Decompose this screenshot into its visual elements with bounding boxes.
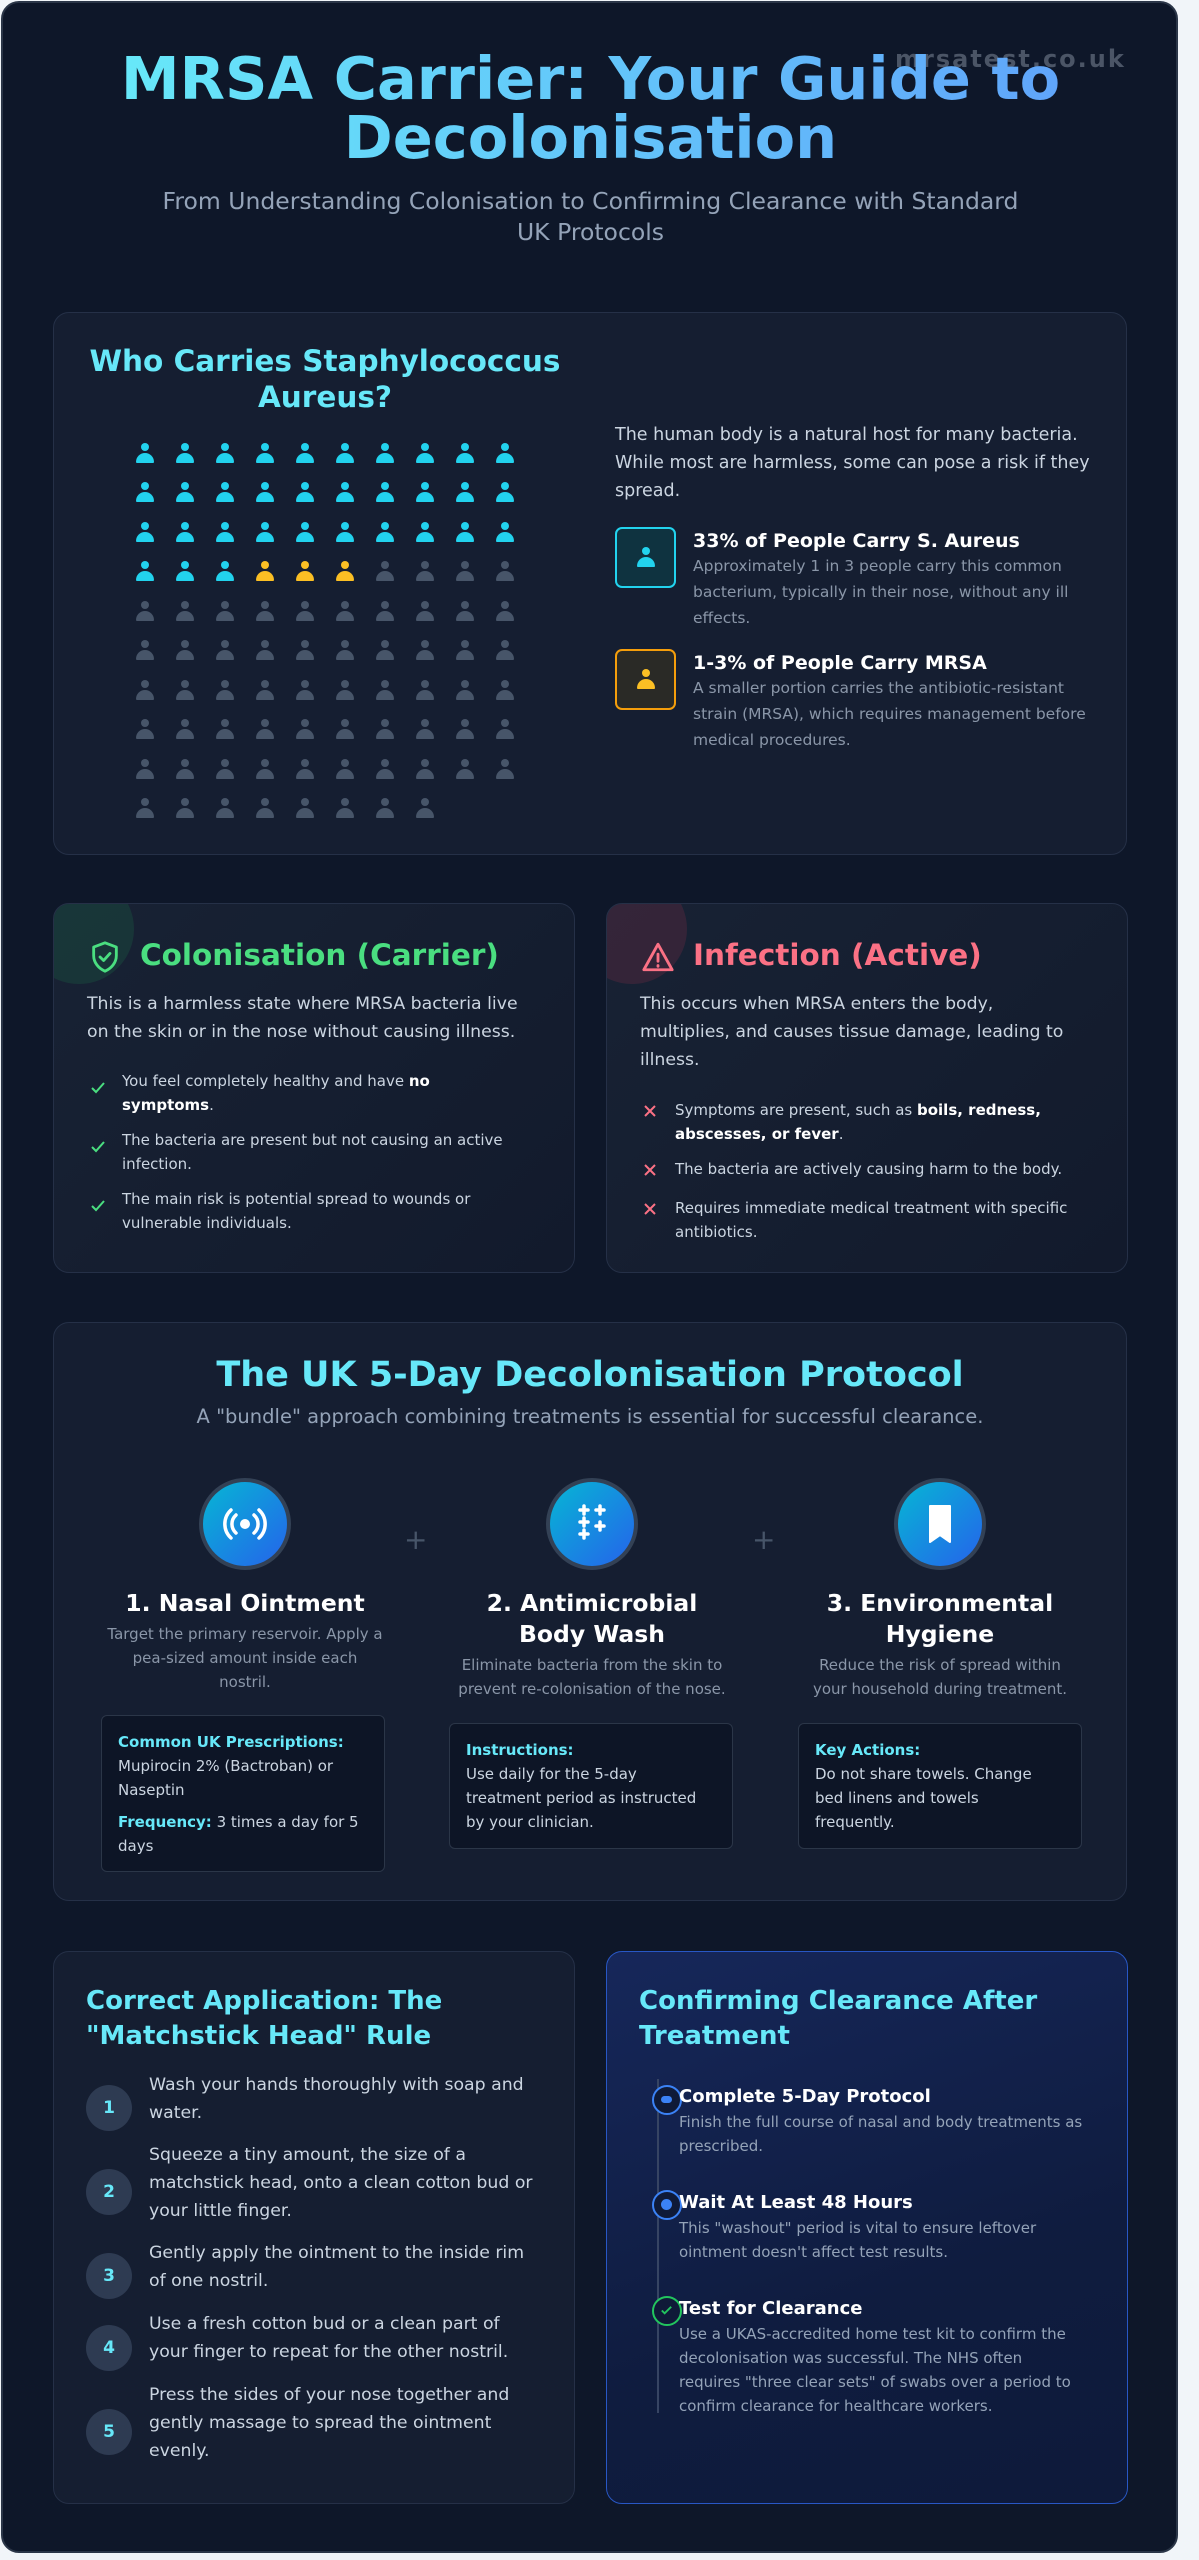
step: hygiene: Hygiene: [886, 1620, 994, 1648]
title: Decolonisation: [344, 103, 837, 172]
list: colonisation points: You feel completely healthy and have no symptoms.: [122, 1072, 430, 1114]
timeline: Test for Clearance: [679, 2298, 862, 2319]
box: prescriptions: Frequency: 3 times a day for 5 days: [118, 1813, 359, 1855]
heading: colonisation: Colonisation (Carrier): [140, 938, 499, 972]
box: instructions: Use daily for the 5-day treatment period as instructed by your clinician.: [466, 1765, 696, 1831]
icon: warning: [642, 942, 674, 972]
timeline: This "washout" period is vital to ensure leftover ointment doesn't affect test results.: [679, 2219, 1036, 2261]
steps list: [86, 2075, 532, 2461]
heading: clearance: Confirming Clearance After Treatment: [639, 1986, 1037, 2051]
panel: infection: [606, 903, 1128, 1273]
list: colonisation points: The bacteria are present but not causing an active infection.: [122, 1131, 503, 1173]
steps list: 5: [103, 2422, 115, 2442]
steps list: Use a fresh cotton bud or a clean part of your finger to repeat for the other nostril.: [149, 2314, 508, 2362]
box: key actions: Key Actions:: [815, 1741, 920, 1759]
subtitle: protocol: A "bundle" approach combining treatments is essential for successful clearance.: [197, 1405, 983, 1428]
marker: check: [652, 2296, 682, 2326]
box: instructions: [449, 1723, 733, 1849]
box: key actions: [798, 1723, 1082, 1849]
list: infection points: Requires immediate medical treatment with specific antibiotics.: [675, 1199, 1067, 1241]
timeline: Finish the full course of nasal and body treatments as prescribed.: [679, 2113, 1082, 2155]
stat text: 33% of People Carry S. Aureus: [693, 530, 1020, 552]
icon grid: people: [136, 443, 514, 818]
heading: application: Correct Application: The "Matchstick Head" Rule: [86, 1986, 442, 2051]
marker: cloud: [652, 2085, 682, 2115]
icon: nasal: [199, 1478, 291, 1570]
box: prescriptions: Mupirocin 2% (Bactroban) or Naseptin: [118, 1757, 333, 1799]
icon: shield: [92, 941, 118, 973]
watermark: mrsatest.co.uk: [895, 45, 1126, 73]
panel: confirming clearance: [606, 1951, 1128, 2504]
list: colonisation points: [91, 1072, 503, 1232]
heading: who carries: Who Carries Staphylococcus: [90, 344, 560, 378]
steps list: 4: [103, 2338, 115, 2358]
heading: protocol: The UK 5-Day Decolonisation Protocol: [216, 1355, 964, 1395]
timeline: Use a UKAS-accredited home test kit to confirm the decolonisation was successful. The NHS often requires "three clear sets" of swabs over a period to confirm clearance for healthcare workers.: [679, 2325, 1071, 2415]
timeline: [652, 2079, 1082, 2415]
box: key actions: Do not share towels. Change bed linens and towels frequently.: [815, 1765, 1032, 1831]
step: hygiene: Reduce the risk of spread within your household during treatment.: [813, 1656, 1067, 1698]
step: nasal ointment: 1. Nasal Ointment: [125, 1589, 365, 1617]
heading: who carries: Aureus?: [258, 380, 392, 414]
timeline: Complete 5-Day Protocol: [679, 2086, 931, 2107]
box: prescriptions: [101, 1715, 385, 1872]
steps list: 1: [103, 2098, 115, 2118]
step: body wash: Eliminate bacteria from the skin to prevent re-colonisation of the nose.: [458, 1656, 726, 1698]
stat: 1-3%: [615, 649, 1086, 749]
panel: colonisation: [53, 903, 575, 1273]
step: hygiene: 3. Environmental: [827, 1589, 1053, 1617]
steps list: Gently apply the ointment to the inside rim of one nostril.: [149, 2243, 524, 2291]
list: colonisation points: The main risk is potential spread to wounds or vulnerable individuals.: [122, 1190, 470, 1232]
marker: clock: [652, 2190, 682, 2220]
stat text: 1-3% of People Carry MRSA: [693, 652, 987, 674]
stat: 33%: [615, 527, 1068, 627]
title: MRSA Carrier: Your Guide to: [121, 44, 1060, 113]
icon: cyan person: [615, 527, 676, 588]
timeline: Wait At Least 48 Hours: [679, 2192, 913, 2213]
box: prescriptions: Common UK Prescriptions:: [118, 1733, 344, 1751]
title: [3, 49, 1178, 167]
steps list: 2: [103, 2182, 115, 2202]
list: infection points: [644, 1101, 1067, 1241]
panel: application: [53, 1951, 575, 2504]
panel: protocol: [53, 1322, 1127, 1901]
step: body wash: [449, 1478, 733, 1849]
steps list: Wash your hands thoroughly with soap and water.: [149, 2075, 524, 2123]
icon: body wash: [546, 1478, 638, 1570]
list: infection points: Symptoms are present, such as boils, redness, abscesses, or fever.: [675, 1101, 1041, 1143]
text: colonisation description: This is a harmless state where MRSA bacteria live on the skin or in the nose without causing illness.: [87, 994, 518, 1042]
box: instructions: Instructions:: [466, 1741, 574, 1759]
heading: infection: Infection (Active): [693, 938, 982, 972]
subtitle: From Understanding Colonisation to Confirming Clearance with Standard: [163, 187, 1018, 215]
step: nasal ointment: Target the primary reservoir. Apply a pea-sized amount inside each nostril.: [107, 1625, 383, 1691]
icon: plus: +: [404, 1523, 427, 1556]
stat text: A smaller portion carries the antibiotic-resistant strain (MRSA), which requires management before medical procedures.: [693, 679, 1086, 749]
step: body wash: 2. Antimicrobial: [487, 1589, 697, 1617]
step: nasal ointment: [101, 1478, 385, 1872]
step: body wash: Body Wash: [519, 1620, 665, 1648]
text: infection description: This occurs when MRSA enters the body, multiplies, and causes tissue damage, leading to illness.: [640, 994, 1063, 1070]
steps list: Press the sides of your nose together and gently massage to spread the ointment evenly.: [149, 2385, 509, 2461]
steps list: 3: [103, 2266, 115, 2286]
heading: who carries: [90, 344, 560, 414]
stat text: Approximately 1 in 3 people carry this common bacterium, typically in their nose, without any ill effects.: [693, 557, 1068, 627]
steps list: Squeeze a tiny amount, the size of a matchstick head, onto a clean cotton bud or your little finger.: [149, 2145, 532, 2221]
icon: bookmark: [894, 1478, 986, 1570]
step: hygiene: [798, 1478, 1082, 1849]
panel: who carries: [53, 312, 1127, 855]
subtitle: [163, 187, 1018, 246]
icon: amber person: [615, 649, 676, 710]
list: infection points: The bacteria are actively causing harm to the body.: [675, 1160, 1062, 1178]
subtitle: UK Protocols: [517, 218, 664, 246]
icon: plus: +: [752, 1523, 775, 1556]
text: intro: The human body is a natural host for many bacteria. While most are harmless, some can pose a risk if they spread.: [615, 425, 1090, 501]
